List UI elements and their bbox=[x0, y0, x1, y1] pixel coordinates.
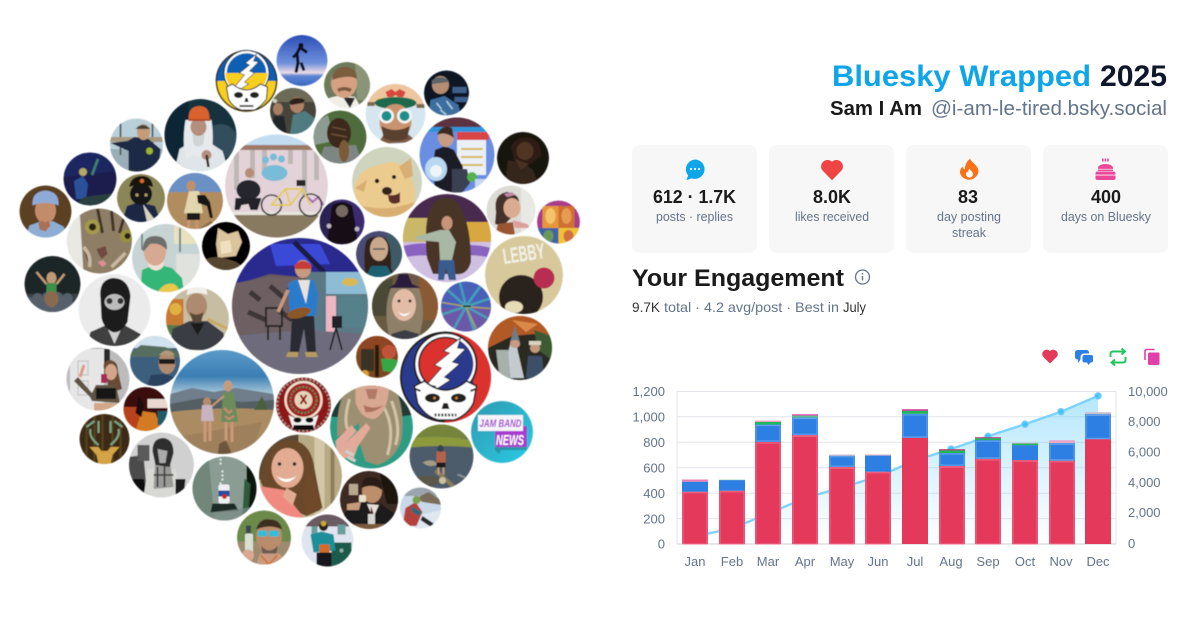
avatar: person in teal jacket in snow bbox=[302, 514, 354, 566]
avatar: blue radial burst bbox=[441, 282, 491, 332]
stat card: days on Bluesky bbox=[1043, 145, 1168, 253]
card value: 612 · 1.7K bbox=[653, 187, 736, 207]
avatar: musician on stage, large bbox=[232, 238, 368, 374]
bar: Feb bbox=[719, 480, 745, 544]
chart legend bbox=[1043, 348, 1160, 366]
right axis labels: 4,000 bbox=[1128, 475, 1161, 490]
month labels: May bbox=[830, 554, 855, 569]
logo word NEWS: NEWS bbox=[496, 432, 524, 449]
avatar: claw machine plush bbox=[419, 117, 495, 195]
left axis labels: 400 bbox=[643, 486, 665, 501]
avatar: hat and teal glasses bbox=[366, 84, 426, 144]
stat card: posts and replies bbox=[632, 145, 757, 253]
avatar: red deer steal your face bbox=[276, 378, 331, 432]
icon: quotes copy bbox=[1145, 350, 1160, 365]
card label: streak bbox=[952, 225, 986, 240]
icon: heart bbox=[822, 160, 842, 180]
avatar: man in suit with cup bbox=[340, 471, 398, 530]
icon: likes heart bbox=[1043, 350, 1057, 363]
heading: Your Engagement: Your Engagement bbox=[632, 265, 844, 292]
bar: Jul bbox=[902, 409, 928, 544]
packaging wordmark: LEBBY bbox=[501, 238, 546, 269]
avatar: Ukraine steal your face bbox=[216, 50, 278, 112]
month labels: Nov bbox=[1049, 554, 1073, 569]
card value: 83 bbox=[958, 187, 978, 207]
card value: 8.0K bbox=[813, 187, 851, 207]
avatar: man with mustache bbox=[324, 62, 370, 108]
avatar: orange lit room bbox=[124, 387, 168, 431]
engagement summary: July bbox=[843, 299, 866, 315]
avatar: smiling woman with witch hat bbox=[372, 273, 438, 339]
bar: Apr bbox=[792, 414, 818, 544]
logo word JAM BAND: JAM BAND bbox=[480, 418, 522, 430]
chart: monthly engagement stacked bars with cumulative line bbox=[632, 384, 1168, 569]
month labels: Oct bbox=[1015, 554, 1035, 569]
avatar: Lebby snack bag bbox=[485, 236, 563, 319]
month labels: Apr bbox=[795, 554, 816, 569]
avatar: selfie with white cap bbox=[166, 285, 229, 351]
bar: Mar bbox=[755, 421, 781, 544]
avatar: man with blue sunglasses bbox=[237, 510, 291, 564]
gridlines bbox=[677, 391, 1116, 544]
stat card: likes received bbox=[769, 145, 894, 253]
avatar: cream dog on black bbox=[202, 222, 250, 270]
avatar: man in green hoodie bbox=[132, 224, 200, 292]
bar: Sep bbox=[975, 437, 1001, 544]
avatar: concert blue silhouette bbox=[64, 152, 116, 206]
user name and handle bbox=[830, 98, 1167, 120]
avatar: bearded man black and white bbox=[78, 274, 150, 346]
avatar: braid from behind bbox=[314, 110, 366, 164]
avatar: dark portrait woman bbox=[497, 132, 549, 184]
avatar: man in blue shirt on dark bbox=[424, 70, 469, 116]
avatar: skier in snow bbox=[400, 487, 442, 529]
stat card: day posting streak bbox=[906, 145, 1031, 253]
engagement summary: 9.7K bbox=[632, 299, 661, 315]
month labels: Sep bbox=[976, 554, 1000, 569]
user name and handle: @i-am-le-tired.bsky.social bbox=[931, 98, 1167, 120]
title: 2025 bbox=[1100, 60, 1167, 93]
card label: likes received bbox=[795, 209, 869, 224]
avatar: leprechaun green bbox=[356, 336, 398, 378]
card label: day posting bbox=[937, 209, 1001, 224]
avatar: woman with long hair smiling bbox=[258, 434, 342, 518]
icon: birthday cake bbox=[1096, 158, 1116, 180]
left axis labels: 1,000 bbox=[632, 410, 665, 424]
avatar: pop art quad portrait bbox=[536, 200, 580, 244]
bar: Oct bbox=[1012, 443, 1038, 544]
avatar: tabby cat close up bbox=[66, 208, 133, 274]
avatar: man in black coat bbox=[110, 118, 164, 173]
avatar: black and white scarf figure bbox=[128, 432, 194, 498]
month labels: Jul bbox=[907, 554, 923, 569]
avatar: long haired guy laughing bbox=[356, 231, 403, 277]
right axis labels: 0 bbox=[1128, 536, 1135, 551]
left axis labels: 800 bbox=[643, 435, 665, 450]
avatar: Phish deer poster bbox=[80, 414, 130, 464]
avatar: white wizard with orange cap bbox=[164, 99, 238, 171]
avatar: man in sunglasses by lake bbox=[130, 336, 180, 386]
avatar: mother and daughter on mountain bbox=[170, 350, 274, 454]
avatar: gnomes and orange rock bbox=[488, 316, 552, 380]
avatar: golden dog bbox=[352, 147, 422, 217]
left axis labels bbox=[632, 384, 665, 552]
avatar: sky jump bbox=[276, 35, 328, 86]
bar: May bbox=[829, 454, 855, 544]
card value: 400 bbox=[1091, 187, 1121, 207]
avatar: crowd guy bbox=[270, 88, 316, 134]
right axis labels: 8,000 bbox=[1128, 414, 1161, 429]
avatar: person on river log bbox=[410, 424, 474, 488]
right axis labels bbox=[1128, 384, 1168, 551]
avatar cluster bbox=[20, 35, 580, 566]
icon: flame bbox=[960, 158, 978, 180]
icon: reposts arrows bbox=[1110, 348, 1126, 366]
avatar: crowd with shoulder rider bbox=[24, 256, 80, 312]
left axis labels: 200 bbox=[643, 512, 665, 526]
month labels: Aug bbox=[939, 554, 963, 569]
cumulative points bbox=[948, 393, 1101, 452]
avatar: steal your face red and blue bbox=[400, 331, 492, 423]
engagement summary: total · 4.2 avg/post · Best in bbox=[664, 299, 839, 315]
card label bbox=[937, 209, 1001, 240]
bar: Jan bbox=[682, 480, 708, 544]
avatar: bike against painted wall bbox=[224, 134, 328, 239]
month labels: Dec bbox=[1086, 554, 1110, 569]
cumulative area bbox=[695, 396, 1098, 544]
month labels: Jun bbox=[868, 554, 888, 569]
right axis labels: 2,000 bbox=[1128, 505, 1161, 520]
avatar: man with large bear statue bbox=[403, 194, 491, 282]
title: Bluesky Wrapped bbox=[832, 60, 1091, 93]
avatar: black cat in suit bbox=[117, 174, 165, 222]
bar: Aug bbox=[939, 449, 965, 544]
avatar: woman showing peace sign bbox=[330, 385, 414, 468]
avatar: Jam Band News logo bbox=[471, 401, 533, 463]
cumulative line bbox=[695, 396, 1098, 536]
avatar: beer can in sprinkler bbox=[192, 456, 256, 520]
bar: Jun bbox=[865, 454, 891, 544]
user name and handle: Sam I Am bbox=[830, 98, 922, 120]
bar: Nov bbox=[1049, 440, 1075, 544]
left axis labels: 0 bbox=[658, 536, 665, 552]
right axis labels: 6,000 bbox=[1128, 444, 1161, 460]
bar: Dec bbox=[1085, 412, 1111, 544]
icon: replies chat bbox=[1075, 350, 1093, 365]
left axis labels: 1,200 bbox=[632, 384, 665, 399]
right axis labels: 10,000 bbox=[1128, 384, 1168, 399]
month labels: Feb bbox=[721, 554, 743, 569]
avatar: woman on bed bbox=[486, 185, 536, 235]
avatar: woman with dog bbox=[167, 173, 223, 230]
month labels: Jan bbox=[685, 554, 705, 569]
icon: chat bubble bbox=[686, 160, 705, 180]
avatar: mirror selfie bbox=[66, 348, 130, 411]
card label: days on Bluesky bbox=[1061, 209, 1151, 224]
avatar: surgeon cap bbox=[20, 186, 72, 238]
card label: posts · replies bbox=[656, 209, 733, 224]
month labels: Mar bbox=[757, 554, 780, 569]
month labels bbox=[685, 554, 1110, 569]
left axis labels: 600 bbox=[643, 460, 665, 476]
avatar: emperor in dark hood bbox=[320, 200, 364, 245]
icon: info bbox=[856, 270, 870, 284]
